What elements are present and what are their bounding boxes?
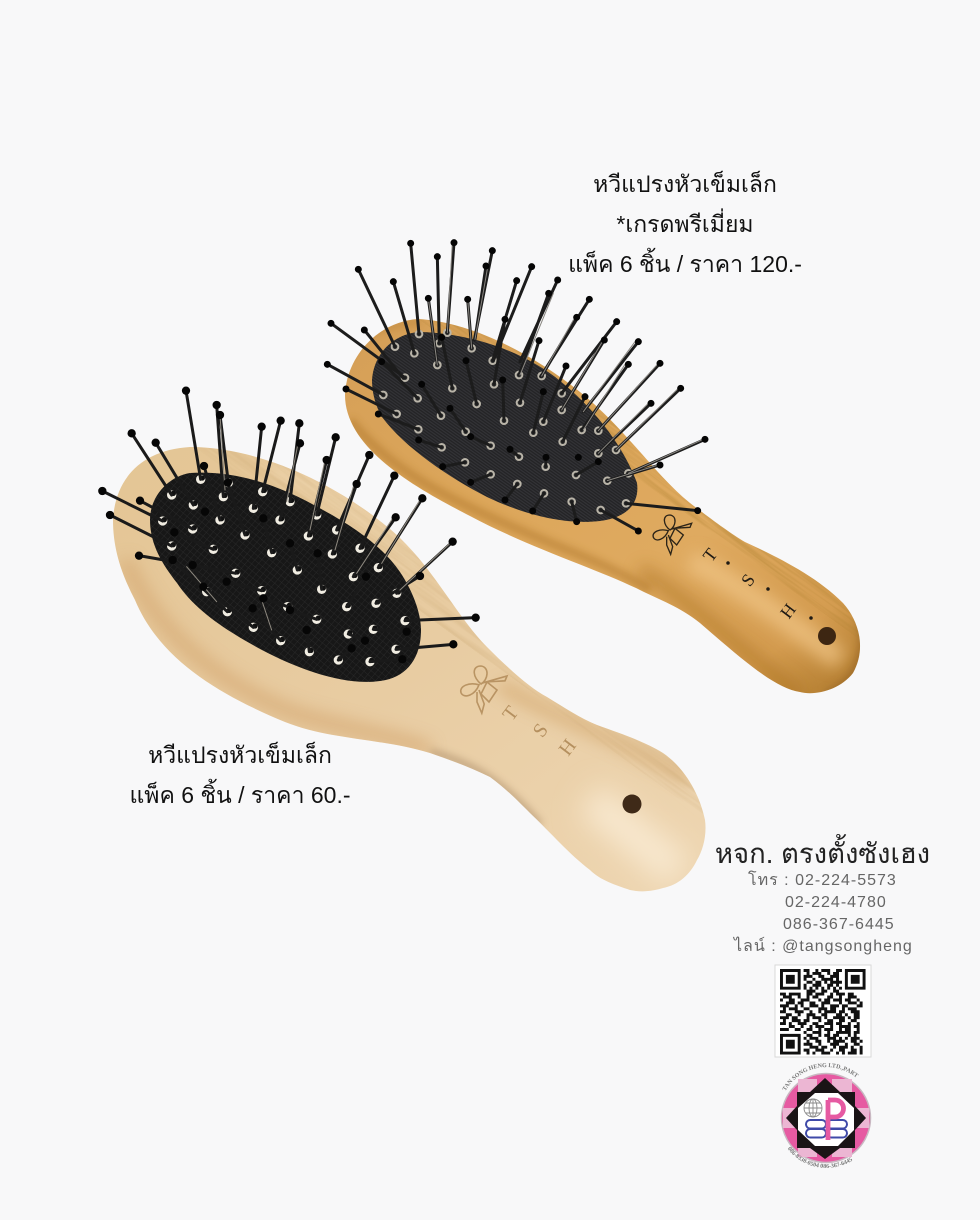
globe (804, 1099, 822, 1117)
heading: standard product: หวีแปรงหัวเข็มเล็ก (148, 742, 332, 768)
white centre (798, 1093, 854, 1146)
engraved text: S (529, 720, 553, 742)
brush body: dark wood (345, 319, 860, 693)
wood tone and grain (106, 436, 702, 886)
brand dots (728, 563, 811, 618)
heading: premium product: แพ็ค 6 ชิ้น / ราคา 120.- (568, 251, 802, 277)
contact details: 086-367-6445 (783, 916, 895, 933)
icon: bow logo (653, 515, 692, 554)
engraved text (498, 702, 581, 760)
heading: standard product (129, 742, 351, 808)
contact details: ไลน์ : @tangsongheng (734, 938, 913, 955)
rubber pad (150, 473, 421, 682)
logo disc (782, 1074, 870, 1162)
engraved bow (461, 666, 507, 713)
hanging hole (622, 794, 642, 814)
brush: premium top right (324, 239, 860, 694)
contact details: 02-224-4780 (785, 894, 887, 911)
QR code (775, 965, 871, 1057)
contact details (733, 870, 913, 955)
brush: standard bottom left (98, 386, 706, 892)
contact details: โทร : 02-224-5573 (748, 872, 897, 889)
hanging hole (818, 627, 836, 645)
light pink panels (783, 1079, 869, 1157)
rubber pad (372, 332, 637, 522)
heading: standard product: แพ็ค 6 ชิ้น / ราคา 60.- (129, 782, 351, 808)
brand mark: T.S.H: H (776, 600, 800, 622)
company logo (780, 1063, 872, 1168)
blue B emblem (806, 1120, 847, 1138)
company name: หจก. ตรงตั้งซังเฮง (715, 838, 930, 869)
heading: premium product: หวีแปรงหัวเข็มเล็ก (593, 171, 777, 197)
pink P emblem (828, 1100, 844, 1140)
black frame (786, 1078, 866, 1159)
logo curved text (782, 1063, 859, 1168)
brush body: light wood (113, 447, 706, 891)
pins (102, 391, 476, 662)
wood tone and grain (350, 319, 860, 692)
brand mark: T.S.H: S (737, 570, 759, 590)
engraved text: T (498, 702, 523, 725)
brand mark: T.S.H: T (699, 545, 721, 565)
heading: premium product (568, 170, 802, 277)
brand mark: T.S.H (699, 545, 800, 622)
heading: premium product: *เกรดพรีเมี่ยม (616, 211, 754, 237)
logo curved text: 086-8338-0504 086-367-6445 (788, 1146, 852, 1168)
pins (327, 243, 705, 531)
logo curved text: TAN SONG HENG LTD.,PART (782, 1063, 859, 1090)
engraved text: H (555, 735, 581, 760)
